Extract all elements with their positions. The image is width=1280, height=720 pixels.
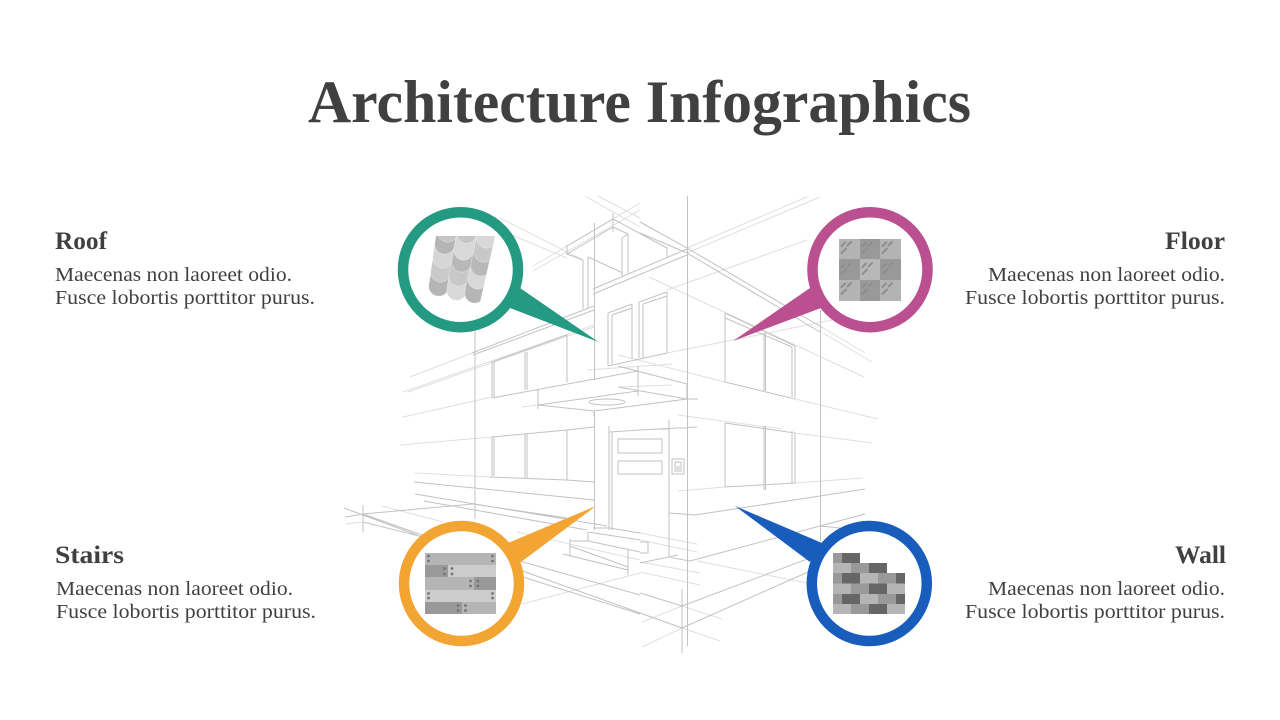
- pin ring: floor: [812, 212, 928, 327]
- floor description: Fusce lobortis porttitor purus.: [965, 287, 1225, 309]
- pin pointer: floor: [733, 288, 821, 341]
- stairs description: [56, 578, 316, 623]
- icon: stair treads: [425, 553, 496, 614]
- wall heading: Wall: [1175, 542, 1226, 569]
- roof heading: Roof: [55, 228, 108, 255]
- stairs heading: Stairs: [55, 542, 124, 569]
- icon: brick wall: [833, 553, 905, 614]
- icon: floor tiles: [839, 239, 901, 301]
- icon: roof tiles: [428, 236, 495, 304]
- pin ring: wall: [812, 526, 927, 641]
- callout: stairs pin: [404, 506, 596, 641]
- panel: stairs: [55, 542, 316, 623]
- floor description: Maecenas non laoreet odio.: [988, 264, 1225, 286]
- callout: wall pin: [735, 506, 927, 641]
- roof description: [55, 264, 315, 309]
- pin ring: roof: [403, 212, 518, 327]
- callout: floor pin: [733, 212, 928, 341]
- roof description: Fusce lobortis porttitor purus.: [55, 287, 315, 309]
- pin pointer: roof: [510, 288, 598, 342]
- floor description: [965, 264, 1225, 309]
- title: Architecture Infographics: [308, 69, 971, 135]
- roof description: Maecenas non laoreet odio.: [55, 264, 292, 286]
- panel: floor: [965, 228, 1225, 309]
- panel: wall: [965, 542, 1226, 623]
- wall description: [965, 578, 1225, 623]
- building wireframe sketch: [344, 196, 878, 653]
- callout: roof pin: [403, 211, 598, 342]
- pin ring: stairs: [404, 526, 519, 641]
- stairs description: Fusce lobortis porttitor purus.: [56, 601, 316, 623]
- floor heading: Floor: [1165, 228, 1225, 255]
- pin pointer: wall: [735, 506, 822, 562]
- wall description: Fusce lobortis porttitor purus.: [965, 601, 1225, 623]
- panel: roof: [55, 228, 315, 309]
- wall description: Maecenas non laoreet odio.: [988, 578, 1225, 600]
- pin pointer: stairs: [508, 506, 596, 562]
- stairs description: Maecenas non laoreet odio.: [56, 578, 293, 600]
